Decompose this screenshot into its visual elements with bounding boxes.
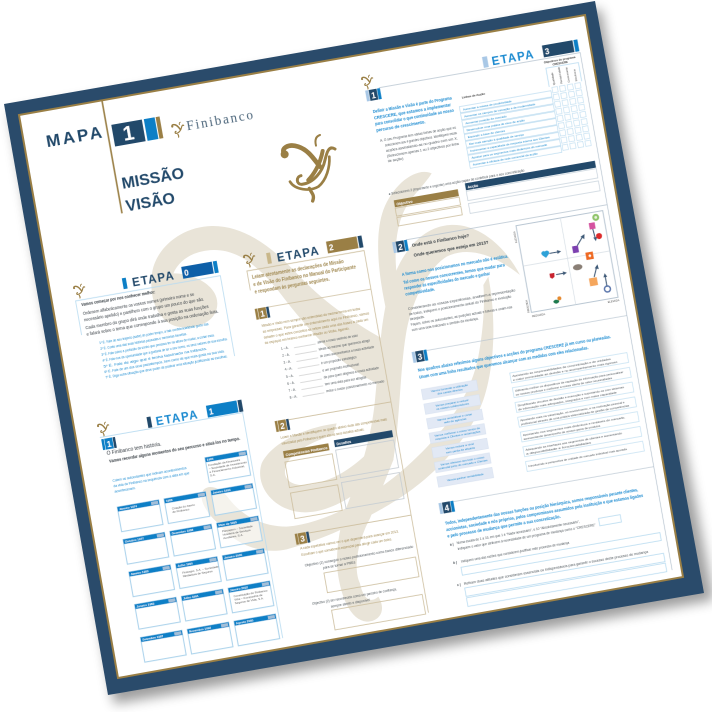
axis labels: ELEVADA — [512, 231, 518, 243]
section 2 text: valorizadas pelo Finibanco e quem são os seus desafios actuais. — [281, 427, 365, 446]
action lines table: Apostar para os segmentos mais dinâmicos do mercado — [471, 143, 548, 160]
section 3 blue statement: Nos quadros abaixo referimos alguns objectivos e acções do programa CRESCERE já em curso ou planeadas. — [417, 334, 611, 373]
subtitle: missão visão: VISÃO — [124, 187, 176, 215]
number badge — [101, 437, 117, 450]
objective 1: para se tornar a PMEs — [323, 560, 356, 570]
card: founding: – Sociedade de Investimento — [209, 460, 248, 471]
intro text: necessário apelido) e partilhem com o grupo um pouco do que são. — [84, 297, 205, 322]
section 2 instructions — [408, 288, 519, 332]
axis labels — [512, 215, 620, 319]
card: row 4: Julho 1991 — [183, 594, 199, 601]
section 2 blue statement: competitividade. — [405, 287, 435, 297]
section 3 text: Escolham o que considerem essencial para atingir cada um deles. — [301, 537, 392, 557]
left action buttons: Vamos fomentar a utilização — [431, 383, 469, 393]
section 2 instructions: desejada. — [409, 315, 425, 321]
right outcome boxes: Utilizando melhor os dispositivos de captação de informação para personalizar — [515, 370, 624, 393]
section 1 matching list: reduz o nosso posicionamento no mercado — [326, 379, 385, 393]
right outcome boxes: Apostando nos segmentos mais dinâmicos e rentáveis do mercado, — [522, 415, 626, 437]
left action buttons: Vamos reduzir a nível — [445, 442, 475, 451]
card: row 5 — [140, 614, 280, 662]
column: objectivo — [394, 189, 462, 226]
axis labels: ELEVADA — [607, 298, 620, 304]
card: row 5: Setembro 1987 — [142, 634, 164, 642]
section 1 matching list: diz para quem dirigimos a nossa actividade — [323, 366, 379, 380]
question list: 3º É. Fale sobre a profissão da sonho que pensava ter na altura de mudar, a cortar essa. — [101, 332, 215, 357]
section 2 badge: 2 — [398, 243, 404, 252]
card: row 5: Agosto 2005 — [236, 618, 254, 625]
panel outline — [379, 53, 672, 605]
left action buttons: potencial junto do mercado e Clientes — [438, 458, 488, 471]
intro text: da vida do Finibanco na sequência com a data em que — [113, 471, 190, 488]
card: row 1: Janeiro 1974 — [119, 504, 138, 511]
title block — [41, 76, 268, 227]
icon: etapa 2 logo mark — [243, 253, 255, 267]
panel outline — [247, 251, 428, 633]
card: row 2: Dezembro 1988 — [171, 528, 194, 536]
card: row 3: Julho 1990 — [177, 562, 193, 568]
section 2 badge — [392, 240, 409, 253]
section 2 blue statement: Tal como os nossos concorrentes, temos que mudar para — [403, 262, 506, 285]
section 2 instructions: Façam, sobre os autocolantes, as posições actuais e futuras e unam-nas — [410, 305, 513, 327]
question a: a | — [450, 542, 454, 547]
left action buttons: dos canais directos — [437, 387, 463, 396]
section 1 matching list: é um propósito institucional — [322, 362, 360, 373]
icon: etapa 1 logo mark — [97, 422, 109, 436]
left action buttons: Vamos melhorar o nosso tempo de — [434, 426, 481, 438]
card: row 1: 1988 — [166, 498, 173, 503]
heading: etapa 1: 1 — [208, 407, 215, 417]
card: row 5: Novembro 1992 — [189, 626, 212, 634]
objectives check grid: Rentabilidade — [556, 66, 563, 84]
heading: etapa 2: ETAPA — [276, 245, 321, 265]
section 2 blue statement: A forma como nos posicionamos no mercado não é estática. — [401, 254, 509, 277]
intro text: Vamos recordar alguns momentos do seu percurso e situá-los no tempo. — [109, 436, 241, 464]
card: row 2: Hoteleira de Serviços — [222, 528, 251, 537]
panel: etapa 0 — [73, 261, 235, 382]
intro text — [106, 428, 246, 494]
section 1 instructions: seleccionem aos 4 grandes objectivos. Identifiquem essas — [385, 131, 457, 148]
question b — [453, 525, 661, 576]
intro text — [252, 257, 358, 296]
section 1 matching list: 1 ▫ A. — [281, 346, 289, 351]
right outcome boxes: Apostando as responsabilidades de concretização e de unidades — [512, 357, 612, 378]
section 1 matching list: ideais ao mesmo que queremos atingir — [318, 338, 371, 352]
section 4 blue statement: Todos, independentemente das nossas funções ou posição hierárquica, somos responsáveis perante clientes, — [445, 487, 639, 526]
action lines table: Aumentar posição de mercado — [465, 114, 507, 125]
intro text: Ordenem alfabeticamente os vossos nomes (primeiro nome e se — [82, 292, 195, 316]
subtitle: missão visão: MISSÃO — [120, 162, 185, 193]
heading: etapa 3: ETAPA — [491, 49, 536, 68]
icon: etapa 0 logo mark — [73, 284, 85, 298]
card: founding: Fundação da Financeira — [208, 458, 241, 467]
question a: Numa escala de 1 a 10, em que 1 é "Nada necessário", e 10 "Absolutamente necessário", — [456, 520, 580, 545]
intro text: Cada membro do grupo dirá onde trabalha e gosta as suas funções — [85, 304, 209, 330]
positioning matrix — [511, 210, 620, 319]
panel: etapa 1 — [98, 400, 284, 663]
section 4 blue statement: accionistas, sociedade e nós próprios, pelos compromissos assumidos pela instituição e que estamos ligados — [446, 493, 644, 532]
section 1 instructions: A. O seu Programa tem várias linhas de acção que os — [380, 126, 456, 143]
intro text: e de Visão do Finibanco no Manual do Participante — [253, 264, 357, 288]
action lines table: Aumentar a eficácia de rede comercial da acção — [472, 152, 538, 167]
intro text: O Finibanco tem história. — [106, 442, 162, 457]
card: row 4: Janeiro 2002 — [230, 585, 249, 592]
card: row 1: de Finibanco — [172, 507, 190, 514]
question list: 6º É. Fale de um dos seus passatempos, bem como de que mais gosta na sua vida. — [104, 348, 225, 374]
section 3 badge — [412, 350, 428, 363]
section 2 instructions: Considerando as vossas experiências, analisem a representação — [408, 288, 516, 311]
section 1 text — [261, 305, 372, 345]
card: row 2: Maio de 1995 — [218, 520, 237, 528]
left action buttons: rede de agências — [444, 417, 467, 425]
card: row 3: Finisegur, S.A. – Sociedade — [182, 565, 219, 575]
question b: Indiquem uma das razões que considerem justificar este processo de mudança — [461, 541, 570, 564]
question list: 2º É. Conte uma das suas histórias passadas e memórias favoritas. — [100, 331, 187, 351]
section 1 blue heading: percurso de crescimento. — [376, 119, 426, 133]
number badge: 1 — [106, 440, 113, 449]
panel: etapa 2 — [244, 235, 429, 634]
section 2 questions — [411, 230, 489, 258]
section 1 matching list: 8 ▫ A. — [289, 394, 298, 400]
objective 2: Objectivo (2) ser reconhecido como um parceiro de confiança, — [312, 587, 397, 606]
section 2 text: Leiam a Missão e identifiquem no quadro abaixo duas das competências mais — [280, 417, 387, 440]
question c — [457, 547, 667, 608]
panel outline — [100, 413, 283, 663]
column: desafios: Desafios — [336, 440, 352, 446]
question b: b | — [453, 560, 457, 565]
right outcome boxes: Adequando as interfaces aos segmentos de clientes e aumentando — [525, 431, 623, 452]
heading: etapa 2 — [266, 235, 364, 266]
score box — [598, 515, 621, 526]
section 1 blue heading: para consolidar o que continuidade ao nosso — [375, 108, 455, 127]
column: desafios — [334, 430, 404, 509]
subtitle: missão visão — [120, 162, 189, 215]
left action buttons: Vamos rentabilizar e cortar — [437, 412, 472, 422]
section 1 instructions — [380, 126, 460, 164]
right outcome boxes: Simplificando circuitos de decisão e execução e suportando-os com sistemas — [517, 385, 625, 408]
panel outline — [76, 276, 235, 381]
card: founding: e Financiamento Industrial, — [209, 464, 245, 474]
marker stickers — [536, 213, 613, 305]
section 1 matching list: é um propósito estratégico — [321, 355, 357, 365]
card: founding — [205, 451, 251, 482]
intro text: e falará sobre o tema que corresponde à sua posição na ordenação feita. — [86, 309, 219, 337]
section 1 instruction B: ● Seleccionem 2 (importante e urgente) uma acção capaz de contribuir para o seu concretização — [388, 168, 525, 196]
card: row 2: Outubro 1977 — [125, 537, 145, 544]
gold vertical rule — [101, 101, 123, 213]
heading: etapa 3: 3 — [544, 47, 551, 57]
objective 2 — [312, 583, 426, 633]
question list — [99, 318, 231, 380]
intro text: Leiam atentamente as declarações de Missão — [252, 259, 344, 281]
card: row 3: Janeiro 2000 — [224, 553, 243, 560]
card: row 3 — [129, 549, 268, 597]
question c: c | — [457, 582, 461, 587]
objectives check grid: Crescimento — [564, 66, 571, 83]
section 3 blue statement: Unam com uma linha resultados que queremos alcançar com as medidas com eles relacionadas. — [419, 345, 589, 380]
card: row 3: Mediadora de Seguros — [183, 569, 213, 578]
card: row 2 — [123, 516, 262, 564]
card: row 1 — [117, 484, 257, 532]
section 2 badge — [275, 419, 290, 432]
intro text: aconteceram. — [114, 486, 136, 494]
section 1 matching list: 3 ▫ A. — [283, 359, 292, 365]
heading: etapa 1 — [146, 400, 244, 430]
heading: etapa 1: ETAPA — [155, 409, 200, 429]
title: MAPA: MAPA — [45, 122, 106, 151]
column: competências: Competências Finibanco — [285, 446, 329, 457]
objectives check grid — [544, 55, 593, 151]
section 1 matching list: 4 ▫ A. — [284, 366, 293, 372]
section 1 blue heading: Definir a Missão e Visão é parte do Programa — [372, 95, 453, 114]
right outcome boxes: os nossos produtos e melhorar a nossa oferta de valor necessidades — [515, 376, 613, 397]
card: row 4: Seguros de Vida, S.A. — [235, 596, 264, 605]
heading: etapa 3 — [482, 39, 580, 70]
section 1 badge — [365, 88, 382, 102]
section 1 blue heading: CRESCERE, que estamos a implementar — [374, 102, 451, 120]
intro text: e respondam às perguntas seguintes. — [254, 277, 331, 296]
section 3 badge: 3 — [300, 534, 306, 544]
section 2 blue statement — [401, 254, 512, 297]
axis labels: REDUZIDA — [524, 299, 530, 313]
heading: etapa 0 — [122, 261, 219, 291]
axis labels: REDUZIDA — [532, 312, 546, 318]
left action buttons: Vamos ganhar rentabilidade — [447, 472, 484, 482]
objective 1 — [304, 545, 419, 596]
card: row 2: Auxiliares, S.A. — [223, 533, 244, 540]
section 1 matching list: afirma o nosso caminho de valor — [317, 333, 359, 345]
objectives check grid: Eficiência — [572, 69, 578, 82]
right outcome boxes: acrescentando desempenho de nossos gama de produtos — [523, 424, 601, 441]
map number badge — [111, 116, 164, 148]
right outcome boxes: de informação mais adequados, integrados e com maior capacidade — [518, 390, 617, 411]
action lines table — [458, 81, 562, 168]
card: row 3: Janeiro 1980 — [130, 569, 149, 576]
left action buttons: Vamos oferecer-nos todo o nosso — [440, 455, 485, 467]
intro text: Vamos começar por nos conhecer melhor: — [81, 289, 156, 307]
right outcome boxes: Apostando mais na valorização, no envolvimento, e na motivação pessoal e — [520, 400, 625, 422]
left action buttons — [421, 380, 494, 487]
card: row 1: Criação do banco — [172, 503, 196, 511]
question list: 5º É. Fale de algo que é tenha fascinado na infância. — [103, 346, 207, 369]
objective 1: Objectivo (1) conseguir o nosso posicionamento como banco diferenciado — [304, 545, 414, 568]
icon: etapa 3 logo mark — [361, 75, 373, 89]
section 1 instructions: (Seleccionem apenas 1 ou 2 objectivos por linha — [387, 142, 459, 158]
card: row 1: Janeiro 1993 — [212, 488, 231, 495]
section 1 matching list — [281, 331, 385, 400]
section 1 badge: 1 — [260, 309, 266, 319]
section 2 questions: Onde está o Finibanco hoje? — [411, 233, 470, 248]
action lines table: Aumentar a massa de produtividade — [463, 99, 512, 111]
left action buttons: os nossos colaboradores — [436, 401, 470, 411]
section 4 badge — [438, 501, 455, 514]
card: founding: S.A. — [210, 473, 216, 478]
section 1 badge — [255, 307, 270, 320]
action lines table: Incrementar a capacidade de resposta interna aos Clientes — [470, 135, 550, 153]
question a: indiquem o valor que atribuem à necessidade de um programa de mudança como o "CRESCERE" — [457, 523, 597, 551]
column: objectivo: Objectivo — [396, 199, 414, 206]
section 2 blue statement: responder às especificidades do mercado e ganhar — [404, 271, 491, 291]
card: row 4: Constituição do Finibanco — [233, 588, 268, 598]
section 1 matching list: 2 ▫ A. — [282, 353, 290, 358]
question c: Refiram duas atitudes que consideram essenciais ou indispensáveis para garantir o sucesso deste processo de mudança — [464, 550, 649, 586]
card: row 2: Parcapom – Sociedade — [222, 524, 253, 533]
section 2 instructions: de todos, indiquem o posicionamento actual do Finibanco e evolução — [409, 295, 512, 316]
objectives check grid: Objectivos do programa — [544, 55, 576, 64]
card: founding: 1965 — [207, 457, 214, 462]
right outcome boxes: e maior proximidade ao decisão e no acompanhamento mais rigoroso — [513, 360, 618, 382]
icon: large gold monogram — [281, 135, 335, 201]
action lines table: Dar mais atenção à qualidade de serviço — [469, 132, 525, 146]
section 3 badge — [295, 532, 310, 545]
section 1 text: as empresas. Para garantir um entendimento aqui no Finibanco, vamos — [262, 311, 370, 334]
section 4 blue statement: e pelo processo de mudança que permite a sua concretização. — [447, 514, 561, 539]
card: row 4 — [135, 581, 274, 629]
right outcome boxes: profissional através de uma prática sistematizada de gestão de competências — [520, 403, 630, 426]
question list: 4º É. Fale-nos da oportunidade que a gostaria de ter o seu nome, os seus valores de sua escolha. — [102, 336, 228, 363]
heading: etapa 2: 2 — [328, 243, 335, 253]
card: row 4: Janeiro 1983 — [136, 602, 155, 609]
intro text — [81, 279, 219, 337]
objective 2: sempre atento e disponível — [331, 598, 370, 609]
action lines table: Expandir a base de clientes — [467, 129, 506, 139]
section 1 instructions: acções assinalando-as no quadro com um X. — [386, 136, 458, 153]
right outcome boxes — [510, 353, 644, 472]
action lines table: Aumentar os campos de inovação e de modernidade — [464, 102, 536, 118]
section 1 instructions: de acção) — [387, 157, 404, 163]
section 1 text: de espaços em branco conforme Missão ou Visão, ligando. — [264, 326, 350, 345]
intro text: Colem os autocolantes que indicam acontecimentos — [112, 466, 187, 483]
section 2 badge: 2 — [280, 422, 286, 431]
left action buttons: sem perda de eficácia — [446, 445, 475, 454]
card: row 4: Vida – Companhia de — [234, 593, 263, 602]
column: acção: Acção — [467, 183, 479, 189]
heading: etapa 0: 0 — [184, 268, 190, 278]
objectives check grid: CRESCERE — [552, 60, 568, 66]
section 1 matching list: 5 ▫ A. — [286, 374, 294, 379]
arrows — [546, 228, 609, 296]
section 1 matching list: tem uma data para ser atingida — [325, 375, 367, 386]
column: acção — [465, 161, 600, 213]
section 2 questions: Onde queremos que esteja em 2013? — [413, 240, 489, 258]
column: competências — [283, 443, 342, 519]
left action buttons: Vamos preparar e reduzir — [435, 398, 469, 408]
section 3 text: A cada espetativa vamos ver o que dependerá para avançar em 2013. — [300, 530, 399, 551]
action lines table: Desenvolver uma prática de risco de acção — [466, 118, 525, 132]
left action buttons: resposta a Clientes e reclamações — [435, 429, 481, 441]
icon: Finibanco logo mark — [171, 122, 184, 137]
section 1 text: debater o que estes conceitos se refere cada uma das frases a cada um — [263, 318, 369, 340]
action lines table: Linhas de Acção — [461, 92, 486, 100]
section 1 badge: 1 — [371, 91, 377, 101]
right outcome boxes: a disponibilidade e funcionalidades — [526, 440, 592, 456]
timeline cards — [111, 451, 280, 662]
heading: etapa 0: ETAPA — [131, 270, 176, 290]
section 1 text: Missão e Visão nem sempre são entendidas da mesma forma em todas — [261, 307, 361, 328]
watermark: large beige monogram — [151, 172, 520, 622]
brand name: Finibanco — [185, 107, 256, 133]
section 1 matching list: do como acrescentamos a nossa actividade — [320, 345, 375, 358]
question list: 7º É. Diga outra situação que deve poder de praticar uma situação justificando as escolhas. — [105, 353, 228, 380]
objectives check grid: Qualidade — [550, 72, 556, 85]
section 1 matching list: 6 ▫ A. — [287, 381, 295, 386]
section 1 blue heading — [372, 95, 456, 133]
right outcome boxes: Introduzindo a perspectiva de unidade de mercado individual mais apurada — [528, 447, 627, 468]
panel: etapa 3 — [363, 39, 672, 608]
section 3 badge: 3 — [417, 352, 424, 362]
section 4 badge: 4 — [444, 503, 450, 513]
question list: 1º É. Fale do seu trajecto (sabe) do poder tempo, a fale confidencialidade gosto das — [99, 321, 209, 345]
section 2 instructions: com uma seta indicando o sentido da mudança. — [411, 317, 479, 332]
map number badge: 1 — [121, 122, 136, 146]
section 1 matching list: 7 ▫ A. — [288, 388, 297, 393]
